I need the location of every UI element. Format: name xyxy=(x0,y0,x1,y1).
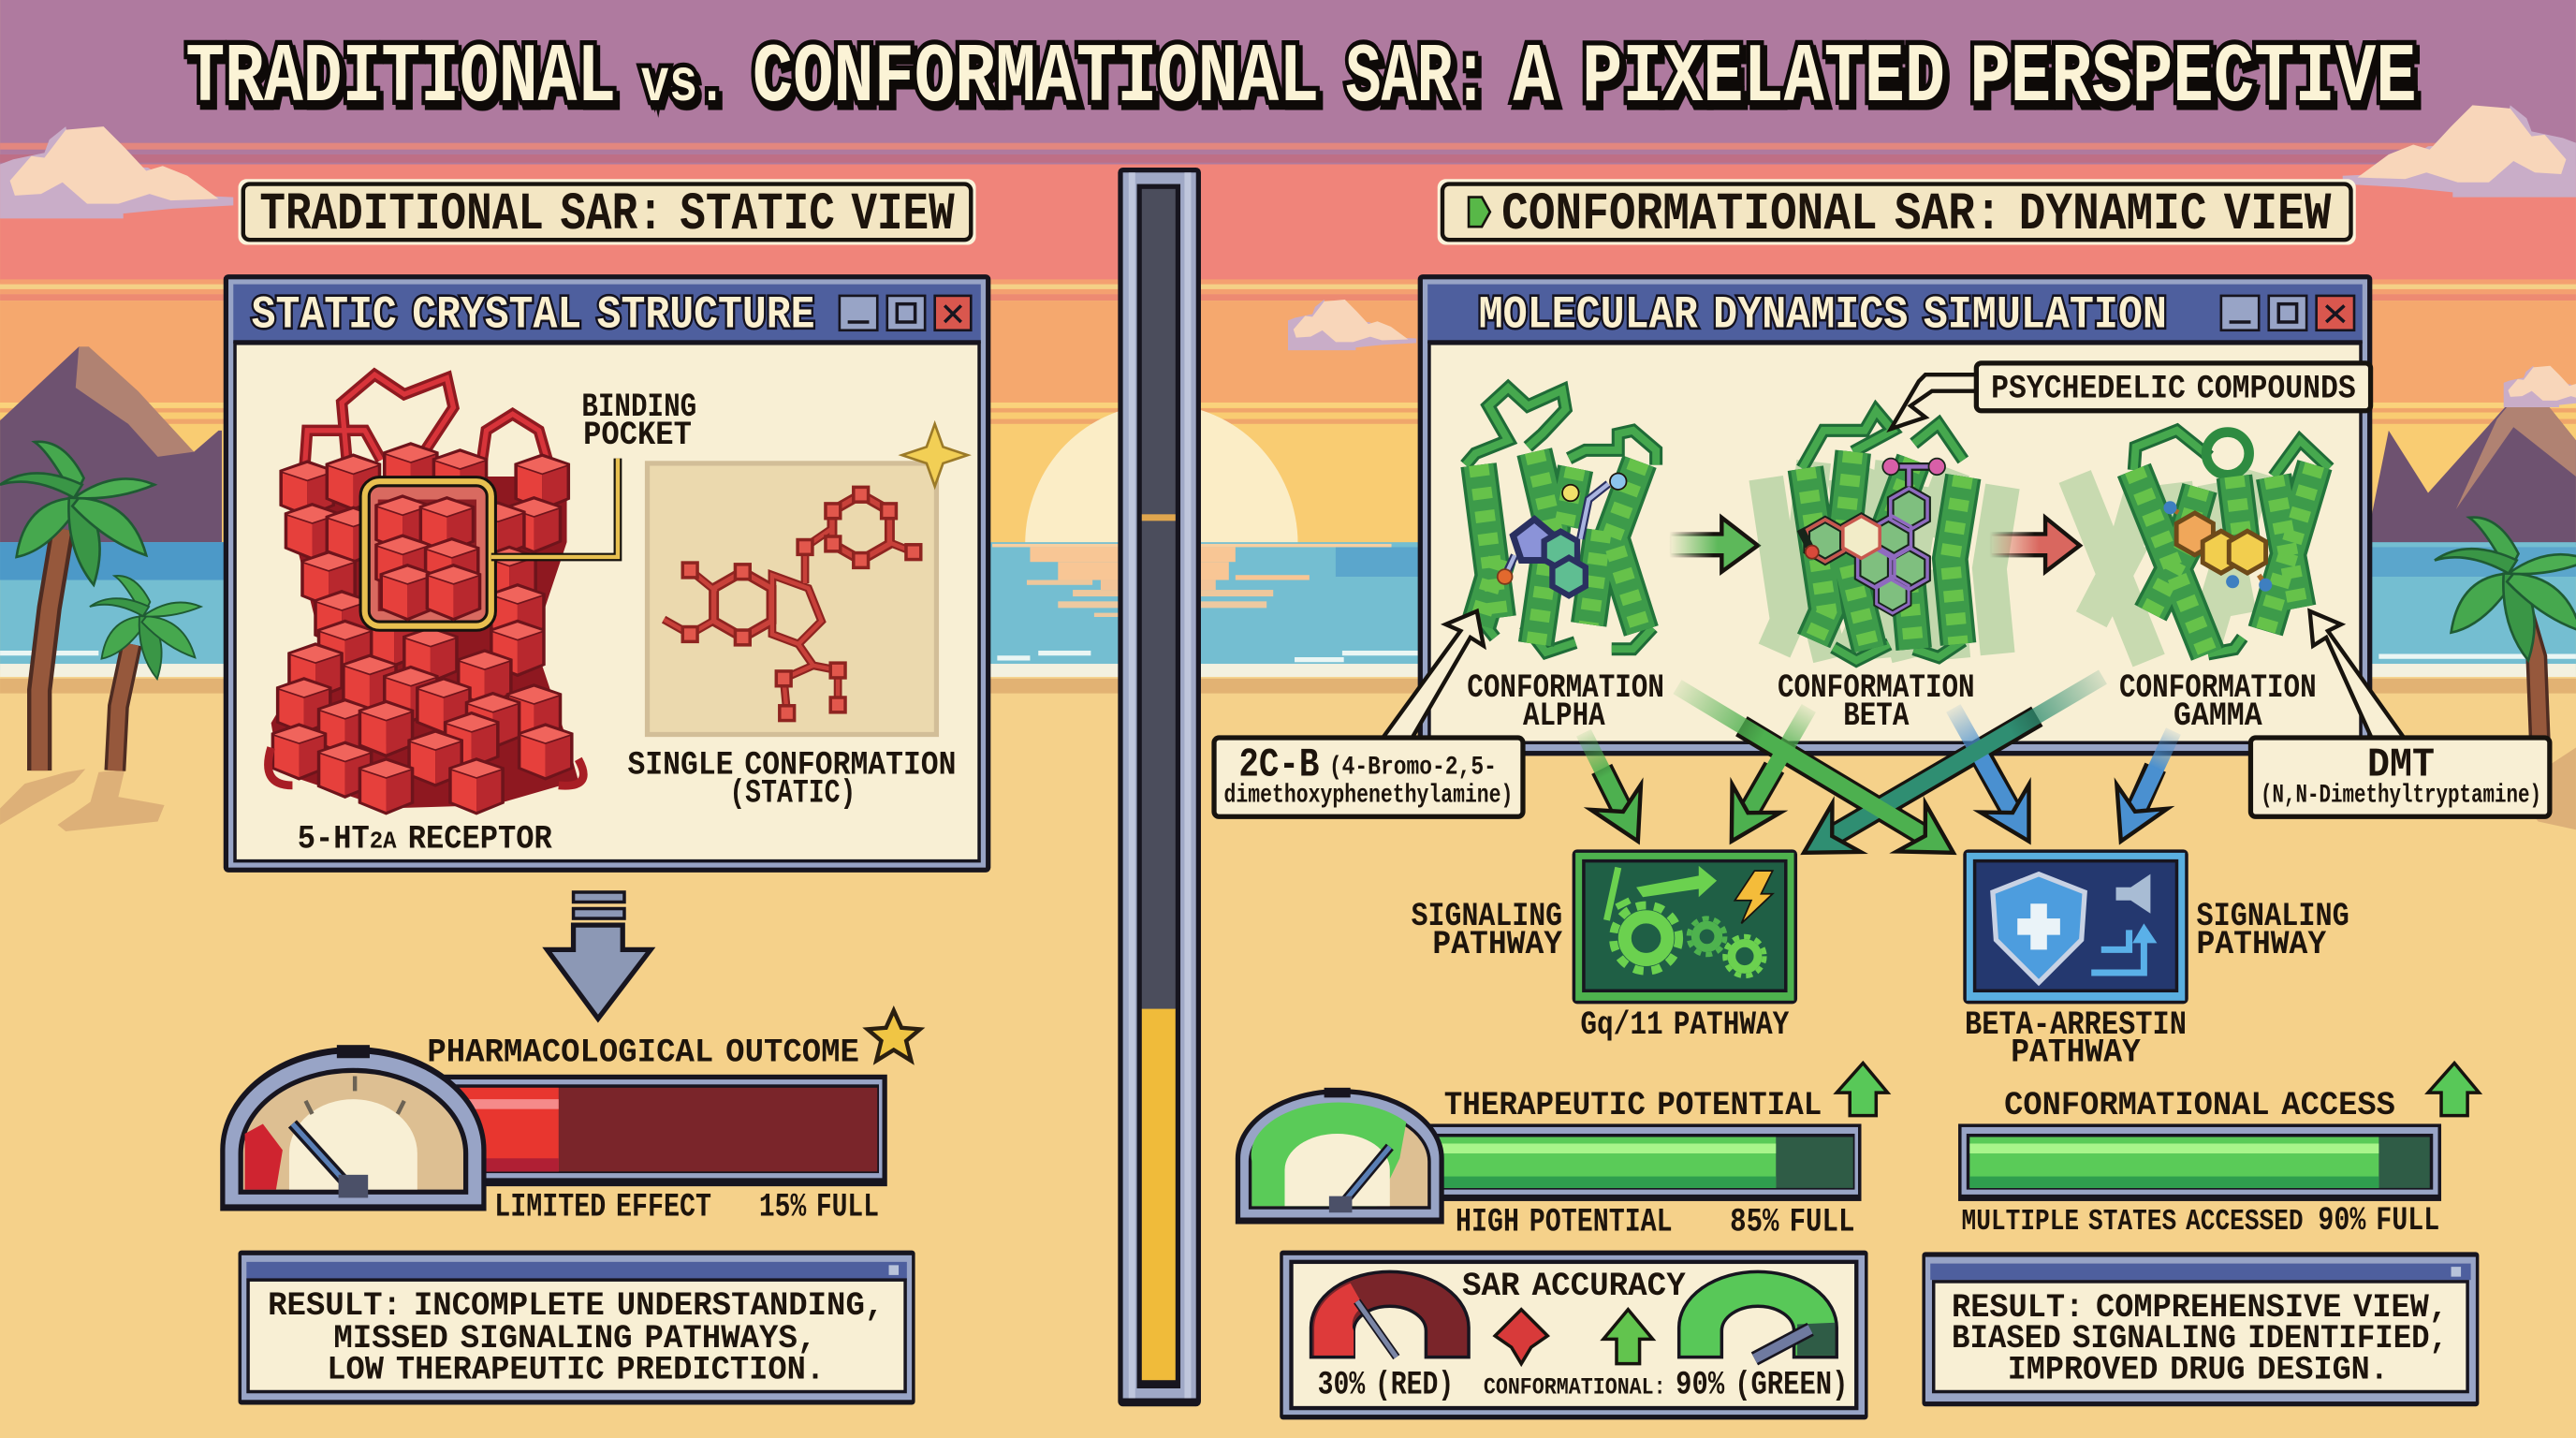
icon: up arrow therapeutic xyxy=(1837,1064,1888,1116)
window title: STATIC CRYSTAL STRUCTURE xyxy=(252,288,815,341)
label: conformation alpha: CONFORMATION xyxy=(1467,669,1664,707)
gauge: low outcome xyxy=(220,1045,487,1211)
values: 90% (GREEN) xyxy=(1676,1366,1848,1403)
bar: limited effect 15% xyxy=(437,1075,887,1186)
speaker xyxy=(2116,874,2150,914)
5-HT2A receptor, red cube model xyxy=(268,374,583,814)
label: Gq/11 pathway: Gq/11 PATHWAY xyxy=(1580,1006,1789,1044)
result box: traditional: LOW THERAPEUTIC PREDICTION. xyxy=(327,1351,825,1388)
palm trees xyxy=(0,442,2576,770)
icon: up arrow access xyxy=(2428,1064,2479,1116)
bar captions access: MULTIPLE STATES ACCESSED xyxy=(1962,1206,2304,1239)
bar captions therapeutic: HIGH POTENTIAL xyxy=(1456,1204,1673,1241)
label: signaling pathway left: PATHWAY xyxy=(1432,926,1562,963)
caption: single conformation: (STATIC) xyxy=(729,774,856,812)
gauge: conformational 90% green xyxy=(1679,1271,1837,1358)
gamma ligand xyxy=(2163,501,2272,592)
heading: pharmacological outcome: PHARMACOLOGICAL OUTCOME xyxy=(427,1034,859,1072)
label: conformation beta: CONFORMATION xyxy=(1778,669,1975,707)
title: SAR: xyxy=(1345,30,1488,125)
callout: 2C-B: 2C-B xyxy=(1238,741,1319,788)
callout: 2C-B xyxy=(1214,611,1523,816)
label: beta-arrestin pathway: BETA-ARRESTIN xyxy=(1965,1006,2187,1044)
label: binding pocket: BINDING xyxy=(581,389,696,426)
title: TRADITIONAL xyxy=(185,30,616,125)
binding pocket leader line xyxy=(491,459,618,557)
conformation gamma protein xyxy=(2075,431,2330,661)
banner: traditional SAR: TRADITIONAL SAR: STATIC VIEW xyxy=(259,184,955,244)
arrow: beta to gamma xyxy=(1989,518,2080,572)
conformation alpha protein xyxy=(1466,388,1656,653)
title: A xyxy=(1513,30,1555,125)
label: beta-arrestin pathway: PATHWAY xyxy=(2011,1034,2141,1072)
caption: receptor: 5-HT2A RECEPTOR xyxy=(298,821,553,858)
callout: DMT: DMT xyxy=(2367,741,2435,788)
label: signaling pathway left: SIGNALING xyxy=(1412,898,1562,935)
label: conformation beta xyxy=(1778,669,1975,735)
panel: molecular dynamics window xyxy=(1418,274,2372,756)
result box: conformational: IMPROVED DRUG DESIGN. xyxy=(2008,1351,2389,1388)
shield xyxy=(1993,874,2085,983)
label: binding pocket: POCKET xyxy=(583,417,692,454)
bar: conformational access 90% xyxy=(1958,1123,2441,1201)
result box: conformational: RESULT: COMPREHENSIVE VIEW, xyxy=(1952,1289,2448,1327)
looping arrows xyxy=(2091,930,2144,973)
center divider progress bar xyxy=(1118,168,1201,1406)
label: conformation gamma: CONFORMATION xyxy=(2119,669,2317,707)
sun xyxy=(1025,404,1298,683)
banner: conformational SAR: CONFORMATIONAL SAR: DYNAMIC VIEW xyxy=(1501,184,2332,244)
sand shadows xyxy=(0,748,2576,831)
label: signaling pathway right xyxy=(2197,898,2349,963)
label: conformation alpha: ALPHA xyxy=(1523,697,1605,735)
result box: traditional: MISSED SIGNALING PATHWAYS, xyxy=(333,1320,816,1357)
label: signaling pathway right: SIGNALING xyxy=(2197,898,2349,935)
alpha ligand xyxy=(1498,473,1627,595)
gears xyxy=(1613,905,1764,976)
sea xyxy=(0,542,2576,681)
title: PERSPECTIVE xyxy=(1969,30,2417,125)
mountains xyxy=(0,346,2576,546)
bar captions: LIMITED EFFECT xyxy=(494,1189,711,1226)
callout: 2C-B: dimethoxyphenethylamine) xyxy=(1224,781,1513,810)
bar: therapeutic potential 85% xyxy=(1421,1123,1862,1201)
icon tile: Gq/11 pathway xyxy=(1573,849,1797,1004)
pathway arrows from conformations xyxy=(1584,677,2174,853)
panel: SAR accuracy xyxy=(1280,1251,1868,1419)
heading: SAR ACCURACY xyxy=(1462,1268,1686,1305)
label: conformation gamma xyxy=(2119,669,2317,735)
heading: conformational access: CONFORMATIONAL ACCESS xyxy=(2004,1087,2395,1124)
label: signaling pathway right: PATHWAY xyxy=(2197,926,2326,963)
panel: static crystal structure window xyxy=(224,274,990,873)
clouds xyxy=(0,105,2576,407)
title: PIXELATED xyxy=(1582,30,1945,125)
callout: DMT xyxy=(2250,611,2550,816)
callout: 2C-B: (4-Bromo-2,5- xyxy=(1329,754,1497,783)
window title: MOLECULAR DYNAMICS SIMULATION xyxy=(1479,288,2167,341)
values xyxy=(1318,1366,1848,1403)
arrow: alpha to beta xyxy=(1669,518,1758,572)
bar captions: 15% FULL xyxy=(759,1189,879,1226)
icon tile: beta-arrestin pathway xyxy=(1963,849,2188,1004)
icon: gold sparkle xyxy=(902,424,968,486)
title xyxy=(185,30,2417,125)
result box: traditional: RESULT: INCOMPLETE UNDERSTANDING, xyxy=(268,1287,884,1325)
caption: single conformation: SINGLE CONFORMATION xyxy=(627,747,956,785)
icon: green diamond xyxy=(1603,1310,1653,1364)
window buttons xyxy=(2221,296,2354,330)
icon: red diamond xyxy=(1495,1310,1547,1364)
label: binding pocket xyxy=(581,389,696,454)
binding pocket highlight xyxy=(365,481,491,626)
gauge: high potential xyxy=(1236,1088,1444,1224)
sand xyxy=(0,677,2576,1438)
result box: traditional xyxy=(239,1251,915,1405)
arrow: down to outcome xyxy=(547,892,651,1019)
result box: conformational xyxy=(1922,1252,2479,1406)
gauge: traditional 30% red xyxy=(1311,1271,1469,1357)
conformation beta protein xyxy=(1766,411,2002,661)
heading: therapeutic potential: THERAPEUTIC POTENTIAL xyxy=(1444,1087,1822,1124)
ligand panel: single conformation molecule xyxy=(648,463,936,734)
bar captions therapeutic xyxy=(1456,1204,1854,1241)
icon: star xyxy=(868,1010,920,1061)
label: conformation alpha xyxy=(1467,669,1664,735)
callout: psychedelic compounds xyxy=(1891,363,2371,429)
title: CONFORMATIONAL xyxy=(753,30,1319,125)
label: beta-arrestin pathway xyxy=(1965,1006,2187,1072)
result box: conformational: BIASED SIGNALING IDENTIFIED, xyxy=(1952,1320,2448,1357)
label: signaling pathway left xyxy=(1412,898,1562,963)
bar captions xyxy=(494,1189,879,1226)
values: 30% (RED) xyxy=(1318,1366,1454,1403)
callout: psychedelic compounds: PSYCHEDELIC COMPOUNDS xyxy=(1991,371,2356,408)
window buttons xyxy=(840,296,971,330)
beta ligand xyxy=(1801,459,1945,613)
bar captions access: 90% FULL xyxy=(2318,1202,2439,1240)
arrow xyxy=(1636,866,1717,897)
lightning xyxy=(1734,871,1773,923)
label: conformation beta: BETA xyxy=(1843,697,1910,735)
caption: single conformation xyxy=(627,747,956,812)
binding pocket leader highlight xyxy=(491,459,618,557)
bar captions therapeutic: 85% FULL xyxy=(1730,1204,1854,1241)
title: vs. xyxy=(641,51,726,119)
icon: play marker xyxy=(1469,198,1490,227)
label: conformation gamma: GAMMA xyxy=(2174,697,2263,735)
values: CONFORMATIONAL: xyxy=(1484,1375,1666,1401)
